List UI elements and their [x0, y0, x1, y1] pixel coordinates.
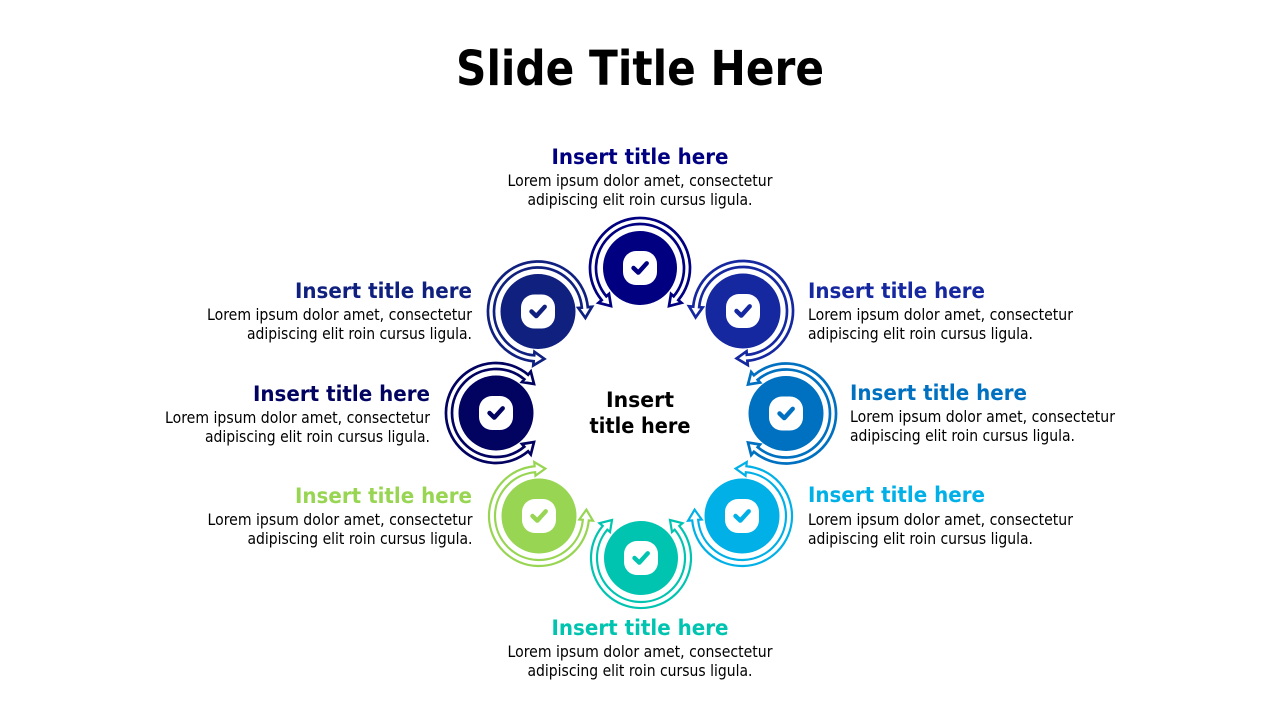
text block: lower left: adipiscing elit roin cursus ligula. — [248, 529, 472, 548]
text block: right — [850, 381, 1115, 445]
text block: top: Lorem ipsum dolor amet, consectetur — [508, 171, 773, 190]
text block: left — [165, 382, 430, 446]
text block: lower right: adipiscing elit roin cursus ligula. — [808, 529, 1033, 548]
node: lower left — [468, 454, 601, 587]
text block: lower left: Insert title here — [295, 484, 472, 509]
text block: upper left: adipiscing elit roin cursus ligula. — [247, 324, 472, 343]
text block: left: adipiscing elit roin cursus ligula. — [205, 427, 430, 446]
text block: lower right: Lorem ipsum dolor amet, consectetur — [808, 510, 1073, 529]
text block: bottom: Lorem ipsum dolor amet, consectetur — [508, 642, 773, 661]
node: bottom — [591, 520, 691, 608]
text block: top — [508, 145, 773, 209]
text block: upper right: Insert title here — [808, 279, 985, 304]
text block: bottom: Insert title here — [552, 616, 728, 641]
center label — [590, 388, 690, 439]
node: upper left — [467, 241, 600, 374]
text block: upper right: adipiscing elit roin cursus ligula. — [808, 324, 1033, 343]
text block: upper left — [207, 279, 472, 343]
node: left — [446, 363, 534, 463]
node: lower right — [680, 454, 813, 587]
node: top — [590, 218, 690, 306]
text block: right: Insert title here — [850, 381, 1027, 406]
text block: top: adipiscing elit roin cursus ligula. — [528, 190, 752, 209]
center label: Insert — [606, 388, 674, 413]
center label: title here — [590, 414, 690, 439]
node: upper right — [681, 240, 814, 373]
text block: upper right: Lorem ipsum dolor amet, consectetur — [808, 305, 1073, 324]
text block: lower right — [808, 483, 1073, 548]
text block: lower left: Lorem ipsum dolor amet, consectetur — [208, 510, 473, 529]
text block: right: adipiscing elit roin cursus ligula. — [850, 426, 1075, 445]
text block: top: Insert title here — [552, 145, 728, 170]
title: Slide Title Here — [456, 41, 824, 97]
text block: lower left — [208, 484, 473, 548]
text block: upper right — [808, 279, 1073, 343]
text block: upper left: Insert title here — [295, 279, 472, 304]
text block: lower right: Insert title here — [808, 483, 985, 508]
text block: bottom: adipiscing elit roin cursus ligula. — [528, 661, 752, 680]
node: right — [748, 364, 836, 464]
text block: right: Lorem ipsum dolor amet, consectetur — [850, 407, 1115, 426]
text block: left: Lorem ipsum dolor amet, consectetur — [165, 408, 430, 427]
text block: left: Insert title here — [253, 382, 430, 407]
text block: upper left: Lorem ipsum dolor amet, consectetur — [207, 305, 472, 324]
text block: bottom — [508, 616, 773, 680]
